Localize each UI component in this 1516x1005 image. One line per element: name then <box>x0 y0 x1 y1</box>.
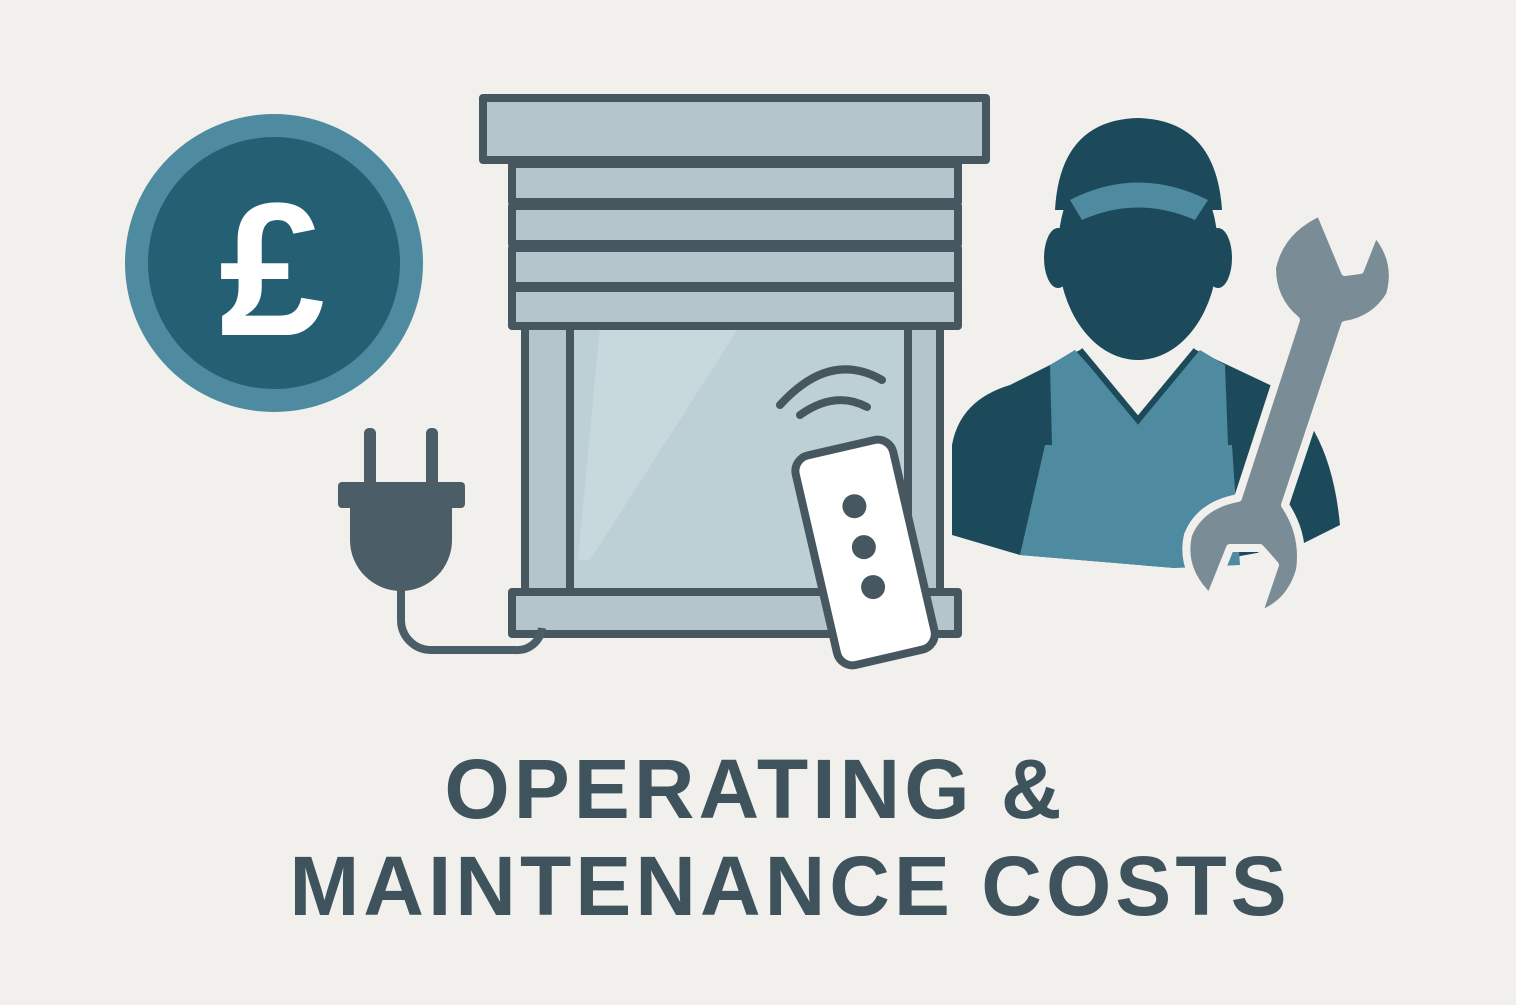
title: MAINTENANCE COSTS <box>289 839 1291 933</box>
title <box>289 742 1291 933</box>
icon: roller blind window <box>483 98 986 634</box>
icon: remote control <box>792 436 938 668</box>
icon: wifi signal <box>780 369 882 415</box>
title: OPERATING & <box>444 742 1066 836</box>
icon: wrench <box>1186 212 1393 615</box>
icon: pound coin <box>125 114 423 412</box>
icon: maintenance worker <box>952 118 1340 568</box>
icon: plug and cord <box>338 428 542 650</box>
icon: pound coin: £ <box>219 164 325 376</box>
